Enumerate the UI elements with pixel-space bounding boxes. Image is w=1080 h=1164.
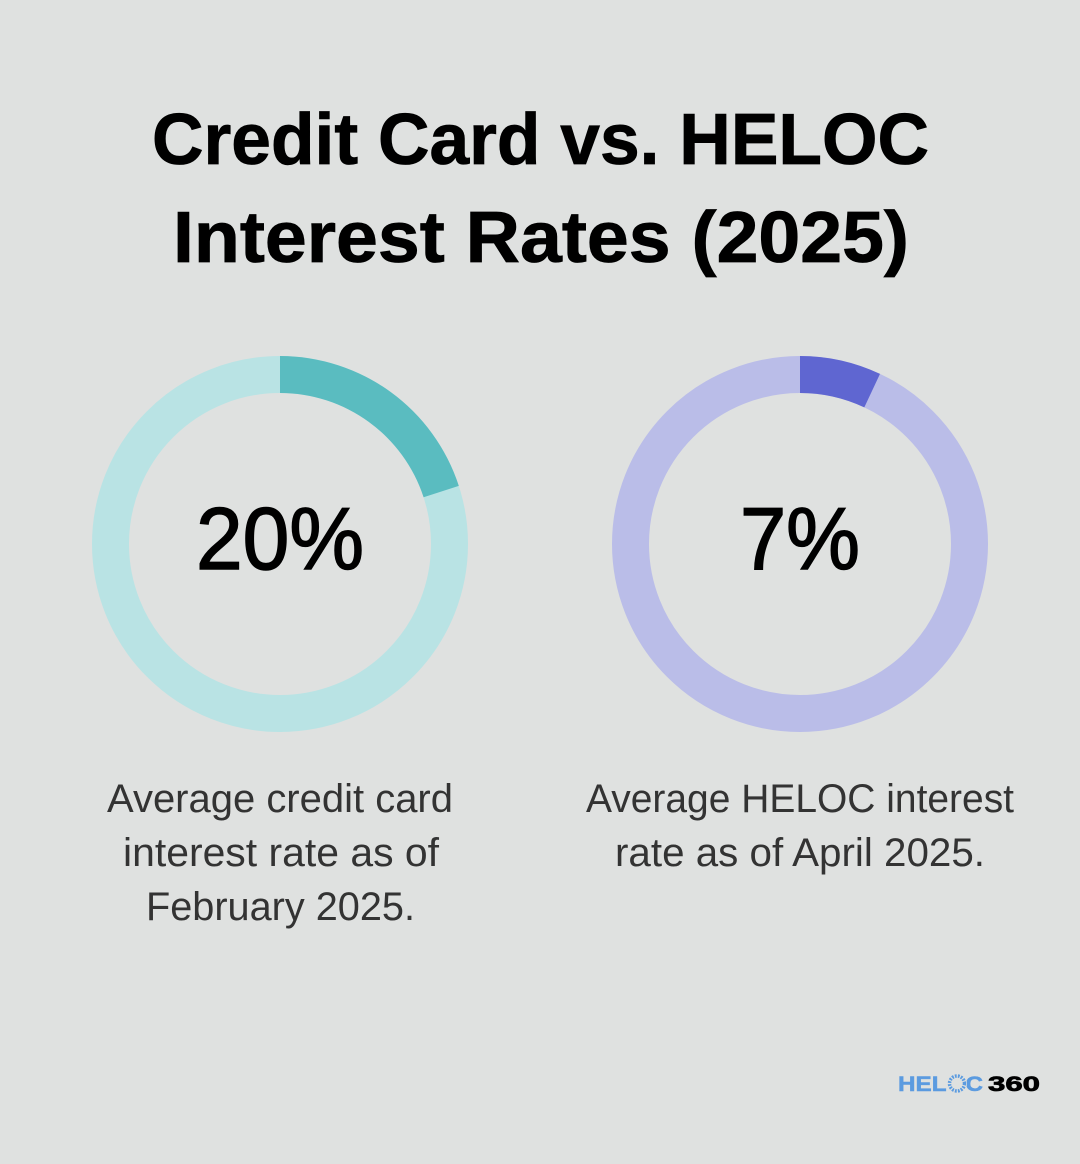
- logo: HELOC360: 360: [988, 1073, 1040, 1096]
- description: HELOC rate: Average HELOC interest: [586, 777, 1014, 821]
- description: credit card rate: interest rate as of: [123, 831, 440, 875]
- donut chart: 20%: [110, 356, 459, 714]
- panel: HELOC rate: [586, 356, 1014, 875]
- title: Interest Rates (2025): [173, 198, 909, 278]
- title: Credit Card vs. HELOC: [152, 100, 929, 180]
- description: HELOC rate: rate as of April 2025.: [615, 831, 985, 875]
- description: HELOC rate: [586, 777, 1014, 875]
- value: 20%: 20%: [196, 489, 364, 588]
- description: credit card rate: [107, 777, 453, 929]
- description: credit card rate: February 2025.: [146, 885, 415, 929]
- panel: credit card rate: [107, 356, 459, 929]
- logo: HELOC360: [898, 1073, 1040, 1096]
- title: [152, 100, 929, 278]
- value: 7%: 7%: [740, 489, 860, 588]
- description: credit card rate: Average credit card: [107, 777, 453, 821]
- logo: HELOC360: HELOC: [898, 1073, 983, 1096]
- donut chart: 7%: [630, 356, 970, 714]
